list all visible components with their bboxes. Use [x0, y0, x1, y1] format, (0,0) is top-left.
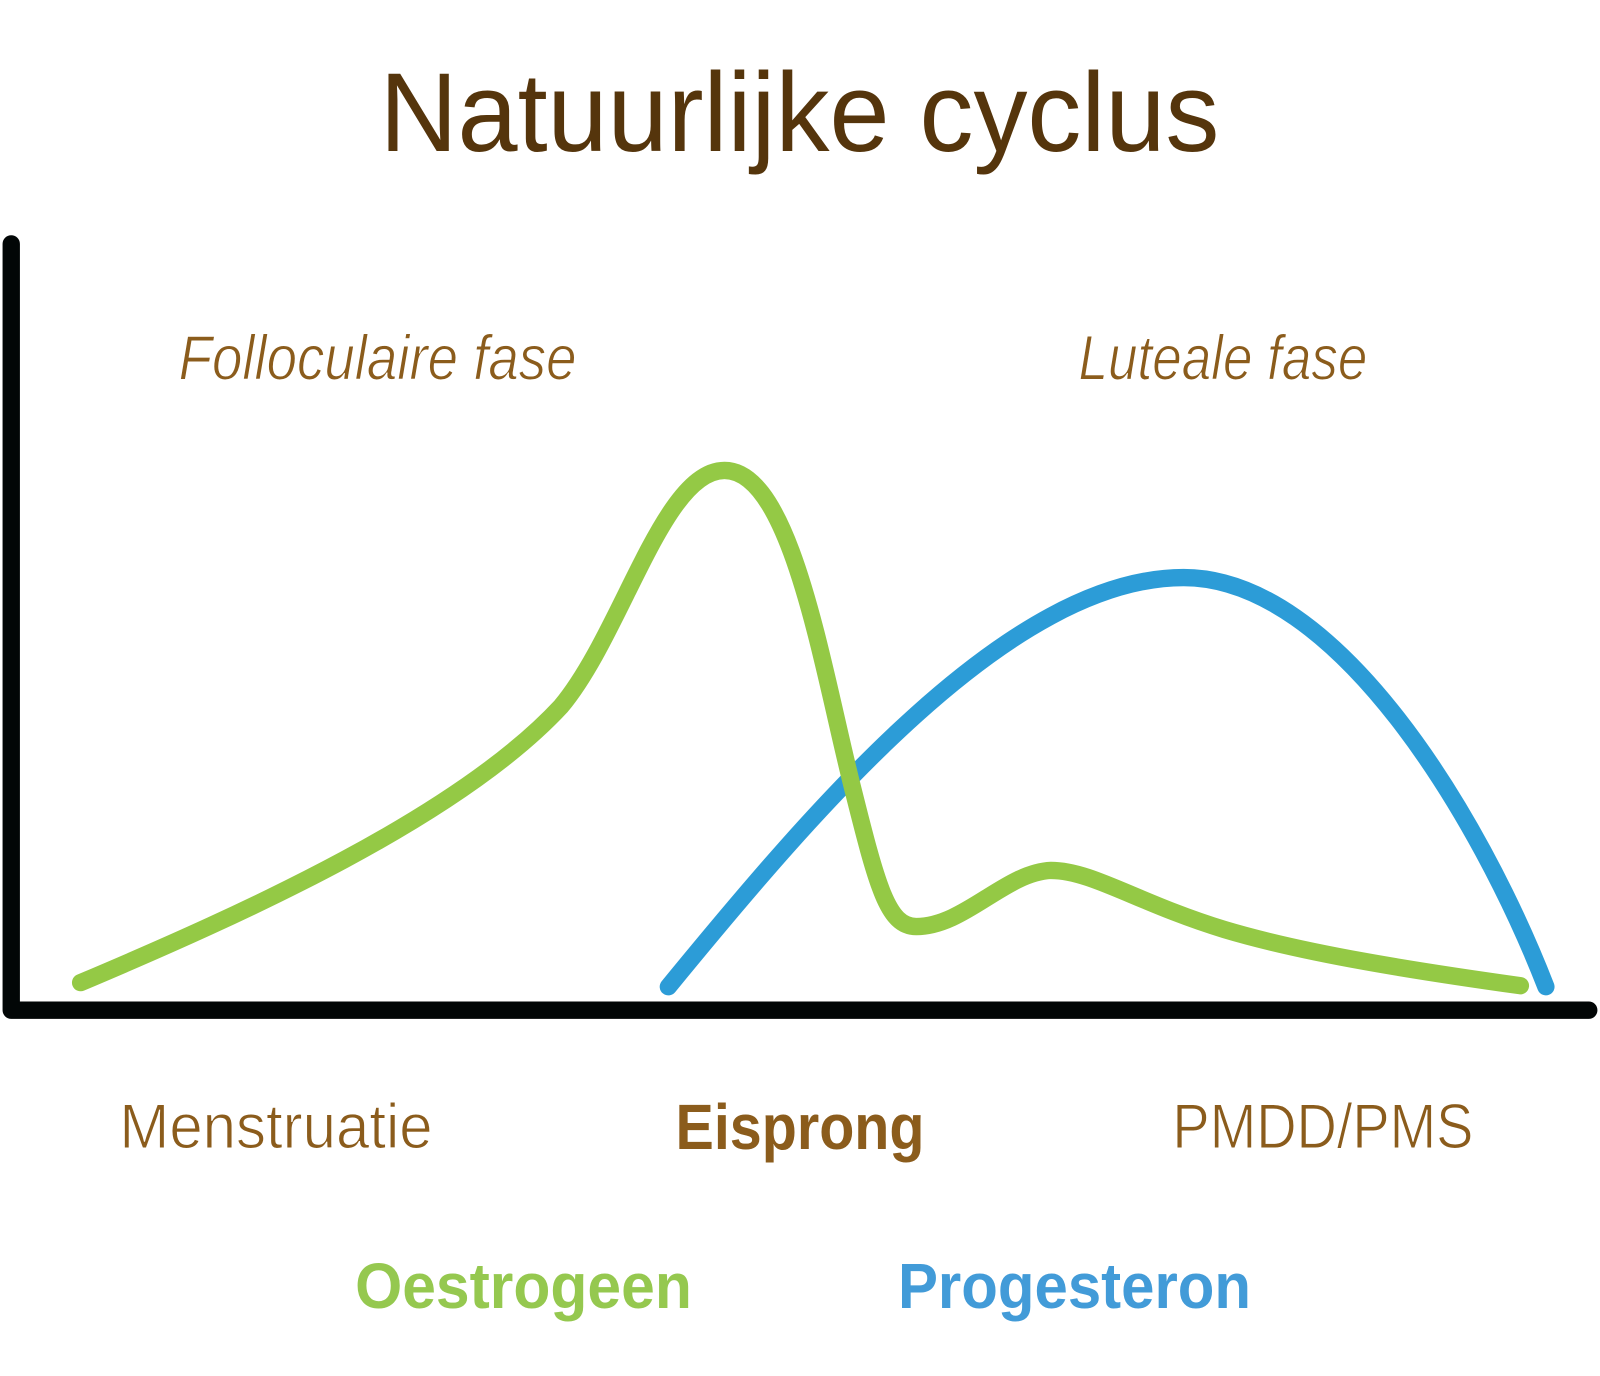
legend: oestrogen: Oestrogeen [355, 1250, 692, 1322]
oestrogen curve [81, 470, 1520, 986]
title: Natuurlijke cyclus [380, 49, 1219, 175]
chart [11, 244, 1589, 1010]
axes [11, 244, 1589, 1010]
label: ovulation: Eisprong [676, 1091, 924, 1163]
phase label: follicular: Folloculaire fase [179, 324, 577, 394]
progesterone curve [668, 578, 1546, 987]
label: menstruation: Menstruatie [119, 1092, 433, 1162]
label: PMDD/PMS: PMDD/PMS [1172, 1092, 1473, 1162]
legend: progesterone: Progesteron [898, 1250, 1251, 1322]
phase label: luteal: Luteale fase [1079, 324, 1367, 394]
